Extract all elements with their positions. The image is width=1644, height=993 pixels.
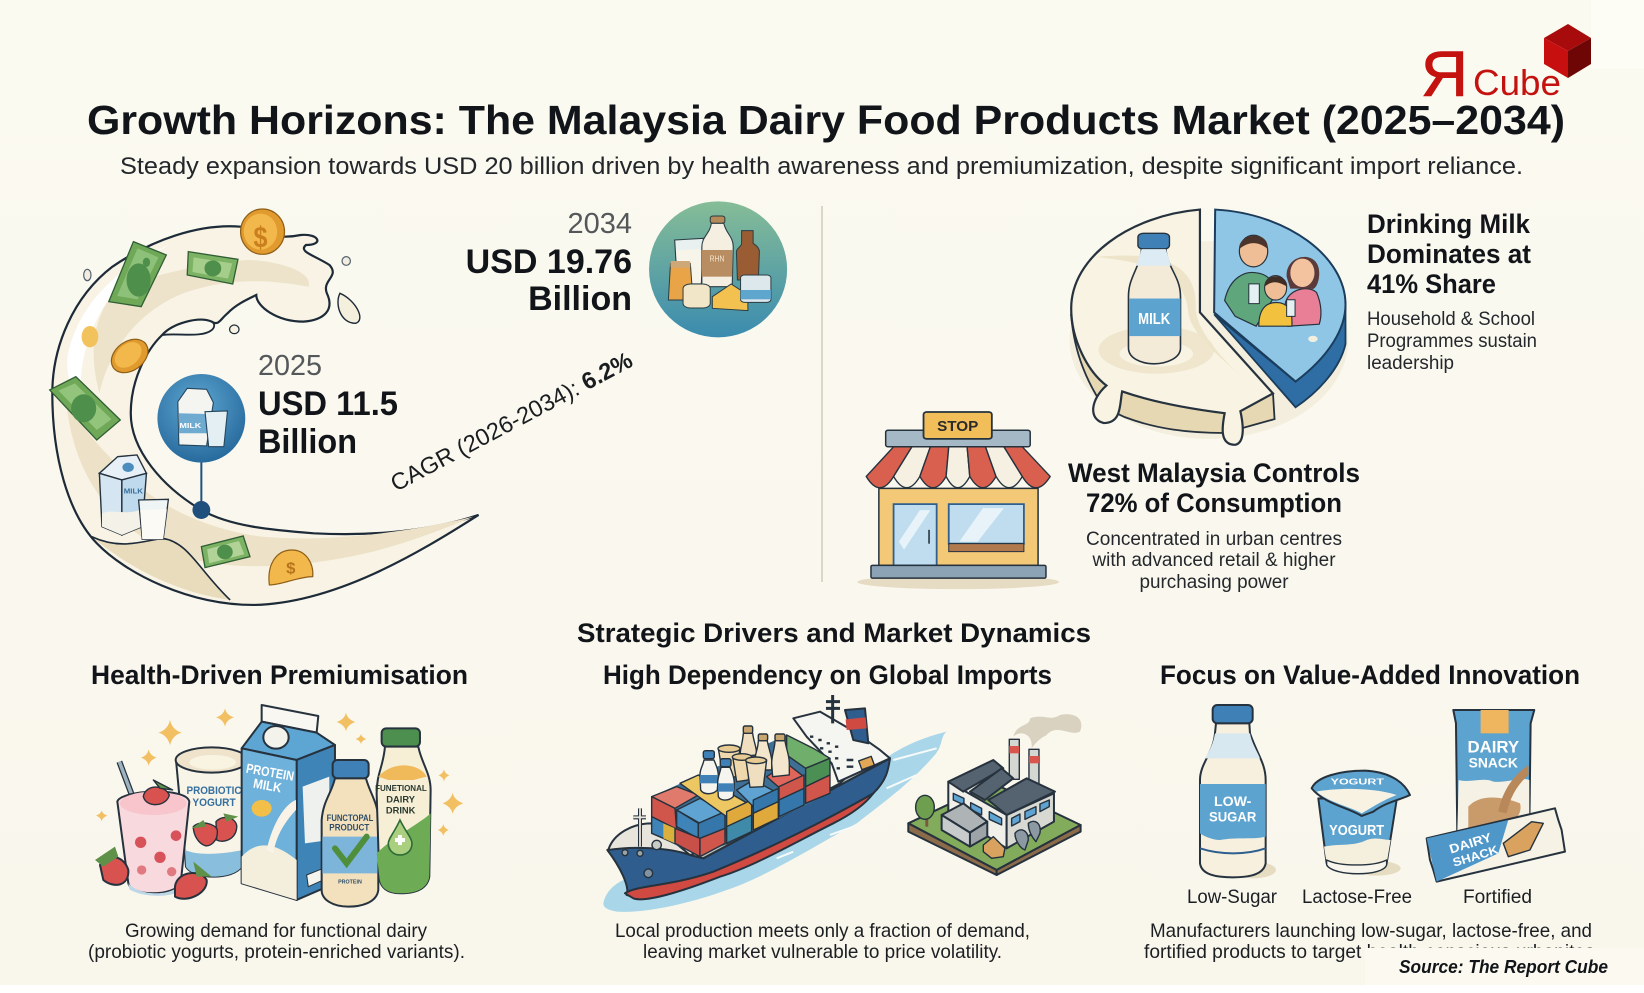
logo: RCube: Cube bbox=[1473, 62, 1561, 103]
icon: banknote bottom bbox=[201, 536, 250, 568]
title: Growth Horizons: The Malaysia Dairy Food Products Market (2025–2034) bbox=[87, 97, 1565, 143]
icon: dairy snack bar: DAIRY bbox=[1448, 830, 1494, 857]
icon: small coin bbox=[82, 326, 98, 347]
icon: factory bbox=[908, 714, 1081, 875]
description: Local production meets only a fraction of demand, bbox=[615, 920, 1030, 942]
logo: RCube bbox=[1421, 24, 1591, 110]
awning stripes bbox=[866, 447, 1050, 488]
text: urban centres: with advanced retail & higher bbox=[1092, 550, 1336, 571]
source credit: Source: The Report Cube bbox=[1399, 957, 1608, 977]
panel: high dependency on imports bbox=[603, 660, 1081, 963]
panel: drinking milk pie bbox=[1070, 209, 1537, 445]
description: Manufacturers launching low-sugar, lactose-free, and bbox=[1150, 920, 1592, 942]
icon: strawberry parfait glass bbox=[117, 762, 189, 896]
icon: functional dairy drink bottle: FUNETIONAL bbox=[375, 783, 427, 793]
source credit bbox=[1365, 948, 1644, 985]
text: household and school: Household & School bbox=[1367, 309, 1535, 330]
icon: store bbox=[857, 412, 1059, 589]
text: urban centres bbox=[1086, 529, 1342, 593]
icon: dairy snack pouch bbox=[1453, 710, 1534, 833]
icon: 2034 dairy products circle: RHN bbox=[710, 254, 724, 264]
heading: West Malaysia Controls bbox=[1068, 458, 1360, 518]
description: leaving market vulnerable to price volatility. bbox=[643, 941, 1002, 963]
year label 2034: 2034 bbox=[567, 208, 632, 240]
heading: Drinking Milk Dominates: Drinking Milk bbox=[1367, 209, 1530, 239]
icon: protein milk carton: PROTEIN bbox=[245, 761, 295, 784]
year label 2025: 2025 bbox=[258, 350, 322, 382]
icon: 2025 milk circle bbox=[157, 374, 245, 463]
icon: store: STOP bbox=[937, 418, 978, 435]
value USD 19.76 Billion: USD 19.76 bbox=[466, 243, 632, 281]
description: Growing demand for functional dairy bbox=[125, 920, 427, 942]
icon: yogurt cup bbox=[1312, 771, 1410, 876]
marker dot bbox=[192, 501, 210, 519]
connector line bbox=[200, 462, 202, 502]
icon: 2025 milk circle: MILK bbox=[180, 422, 201, 430]
description: (probiotic yogurts, protein-enriched variants). bbox=[88, 941, 465, 963]
heading: Drinking Milk Dominates: 41% Share bbox=[1367, 269, 1496, 299]
icon: functional dairy drink bottle: DAIRY bbox=[386, 794, 416, 804]
heading: Drinking Milk Dominates bbox=[1367, 209, 1531, 299]
section heading: Strategic Drivers and Market Dynamics bbox=[577, 618, 1091, 648]
illustration: cargo ship and factory bbox=[603, 695, 1081, 912]
text: urban centres: purchasing power bbox=[1140, 572, 1289, 593]
logo: RCube: R bbox=[1421, 38, 1468, 110]
panel: market growth wave bbox=[50, 201, 787, 605]
text: urban centres: Concentrated in urban centres bbox=[1086, 529, 1342, 550]
icon: dairy snack pouch: DAIRY bbox=[1467, 738, 1519, 757]
illustration: functional dairy products bbox=[95, 705, 463, 907]
label: Lactose-Free: Lactose-Free bbox=[1302, 887, 1412, 908]
icon: milk carton and glass: MILK bbox=[124, 487, 144, 495]
icon: probiotic yogurt: PROBIOTIC bbox=[186, 785, 241, 797]
description bbox=[1144, 920, 1600, 963]
value USD 11.5 Billion bbox=[258, 385, 398, 461]
text: household and school: Programmes sustain bbox=[1367, 331, 1537, 352]
icon: banknote top left bbox=[109, 242, 166, 307]
panel: health-driven premiumisation bbox=[88, 660, 468, 963]
icon: strawberries bbox=[95, 847, 212, 899]
icon: yogurt cup: YOGURT bbox=[1329, 823, 1384, 839]
icon: coin bottom bbox=[269, 550, 313, 585]
icon: banknote left bbox=[50, 377, 120, 440]
icon: functional dairy drink bottle: DRINK bbox=[386, 805, 416, 815]
heading: Focus on Value-Added Innovation bbox=[1160, 660, 1580, 690]
icon: coin top bbox=[241, 209, 285, 254]
icon: coin middle bbox=[105, 336, 155, 376]
subtitle: Steady expansion towards USD 20 billion driven by health awareness and premiumization, despite significant import reliance. bbox=[120, 153, 1523, 180]
icon: family bbox=[1225, 235, 1321, 326]
illustration: innovation products bbox=[1200, 705, 1565, 882]
water wake bbox=[603, 732, 947, 912]
label: Fortified: Fortified bbox=[1463, 887, 1532, 908]
description bbox=[88, 920, 465, 963]
icon: low-sugar bottle bbox=[1200, 705, 1276, 878]
icon: milk bottle bbox=[1128, 233, 1180, 364]
icon: functional product bottle: FUNCTOPAL bbox=[327, 813, 374, 823]
icon: probiotic yogurt: YOGURT bbox=[192, 797, 236, 809]
text: household and school bbox=[1367, 309, 1537, 374]
superstructure bbox=[793, 712, 890, 782]
icon: milk bottle: MILK bbox=[1138, 311, 1171, 329]
text: household and school: leadership bbox=[1367, 353, 1454, 374]
icon: protein milk carton: MILK bbox=[252, 776, 283, 795]
icon: functional dairy drink bottle bbox=[375, 728, 431, 893]
icon: coin top: $ bbox=[253, 221, 267, 254]
milk wave with money illustration bbox=[50, 201, 787, 605]
panel: West Malaysia consumption bbox=[857, 412, 1360, 593]
icon: low-sugar bottle: SUGAR bbox=[1209, 808, 1256, 824]
CAGR label: CAGR (2026-2034): 6.2% bbox=[386, 347, 637, 496]
icon: low-sugar bottle: LOW- bbox=[1214, 793, 1252, 809]
icon: coin bottom: $ bbox=[286, 560, 295, 577]
value USD 11.5 Billion: Billion bbox=[258, 423, 357, 461]
icon: yogurt cup: YOGURT bbox=[1331, 777, 1384, 786]
label: Low-Sugar: Low-Sugar bbox=[1187, 887, 1278, 908]
description: fortified products to target health-conscious urbanites. bbox=[1144, 941, 1600, 963]
icon: milk carton and glass bbox=[99, 455, 168, 539]
value USD 11.5 Billion: USD 11.5 bbox=[258, 385, 398, 423]
description bbox=[615, 920, 1030, 963]
icon: dairy snack pouch: SNACK bbox=[1469, 754, 1518, 770]
icon: 2034 dairy products circle bbox=[649, 201, 787, 337]
icon: functional product bottle: PROTEIN bbox=[338, 880, 362, 886]
icon: probiotic yogurt bbox=[176, 747, 248, 877]
value USD 19.76 Billion: Billion bbox=[528, 280, 632, 318]
icon: dairy snack bar: SHACK bbox=[1451, 843, 1500, 870]
icon: banknote top bbox=[187, 252, 238, 284]
heading: Health-Driven Premiumisation bbox=[91, 660, 468, 690]
heading: High Dependency on Global Imports bbox=[603, 660, 1052, 690]
panel: value-added innovation bbox=[1144, 660, 1600, 963]
icon: functional product bottle bbox=[322, 760, 378, 907]
icon: functional product bottle: PRODUCT bbox=[329, 823, 370, 833]
icon: protein milk carton bbox=[242, 705, 335, 900]
containers bbox=[652, 735, 830, 857]
heading: West Malaysia Controls: 72% of Consumption bbox=[1086, 488, 1342, 518]
pie chart illustration bbox=[1070, 210, 1348, 445]
icon: dairy snack bar bbox=[1427, 808, 1565, 882]
value USD 19.76 Billion bbox=[466, 243, 632, 318]
heading: Drinking Milk Dominates: Dominates at bbox=[1367, 239, 1531, 269]
heading: West Malaysia Controls: West Malaysia Controls bbox=[1068, 458, 1360, 488]
icon: container ship bbox=[607, 695, 890, 899]
milk bottles and cups cargo bbox=[700, 726, 789, 800]
